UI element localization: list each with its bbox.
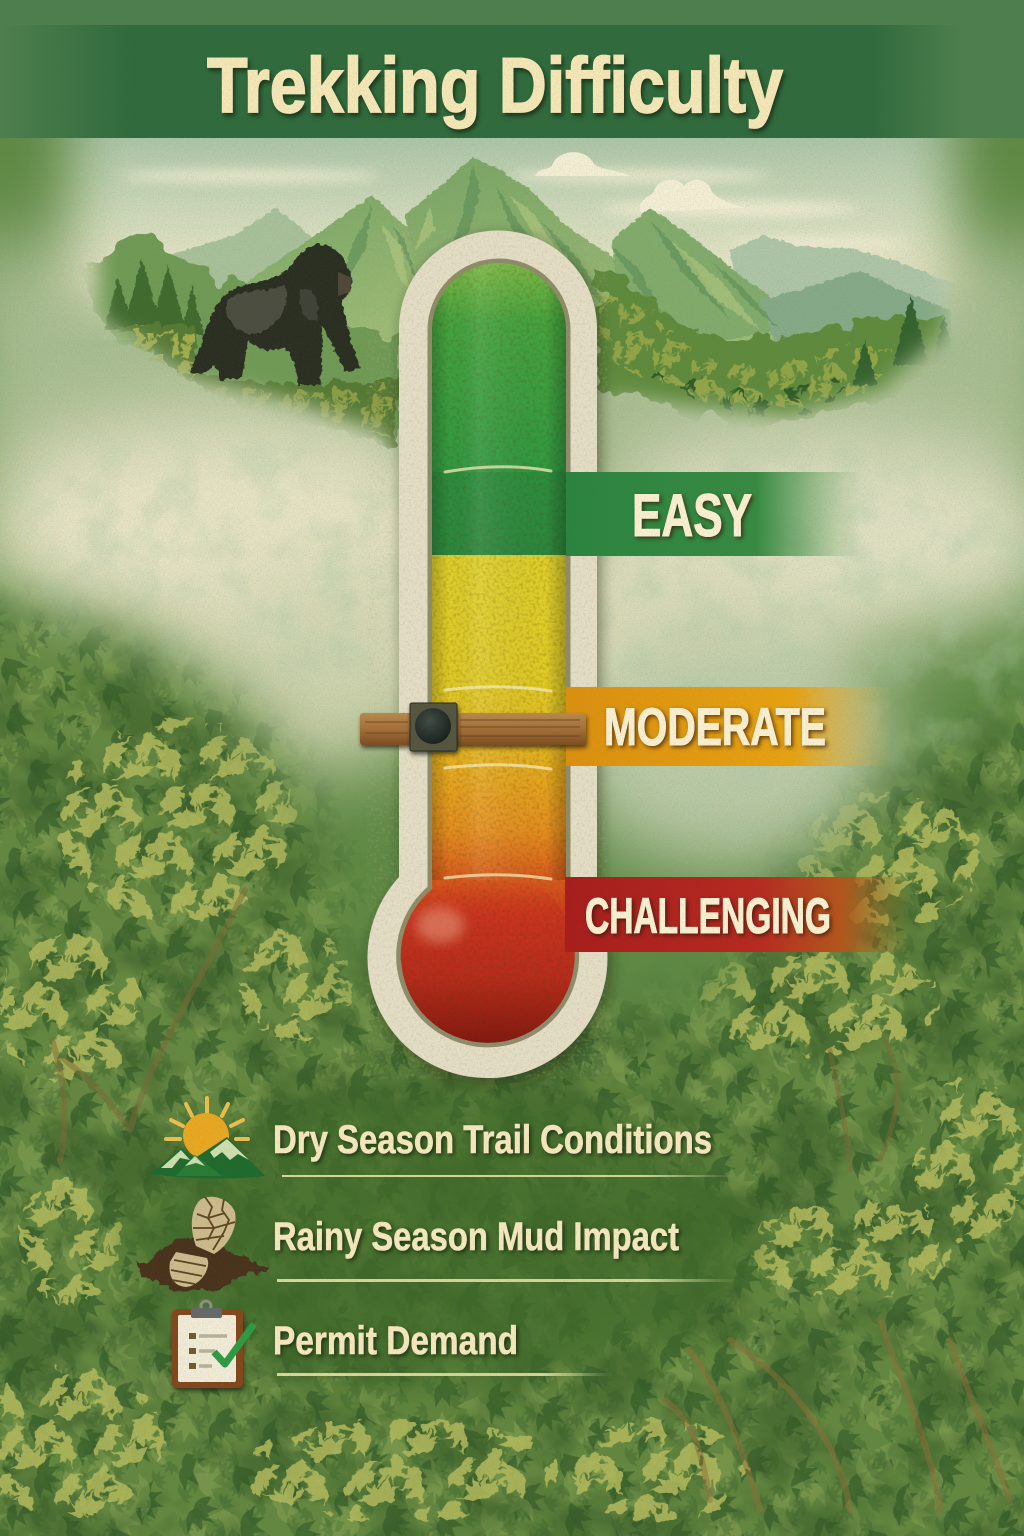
tree branches: [52, 890, 1010, 1510]
tree line right: [597, 275, 956, 430]
thermometer: [367, 231, 607, 1078]
icon: boot print in mud: [135, 1197, 268, 1289]
mountain ridges: [340, 165, 780, 330]
band: challenging: CHALLENGING: [585, 888, 831, 944]
dark panel behind factor list: [130, 1095, 750, 1385]
sky: [0, 130, 1024, 340]
clouds: [120, 170, 910, 249]
label: Rainy Season Mud Impact: [273, 1215, 679, 1259]
band: moderate: [566, 687, 892, 766]
tree line left: [85, 232, 400, 448]
band: easy: [566, 472, 860, 556]
mountains: [170, 157, 960, 360]
cloud puffs: [535, 152, 745, 212]
slider: knob: [415, 708, 451, 744]
foliage: layered leaves: [0, 580, 1024, 1536]
tube highlights: [445, 467, 551, 879]
tube fill: [395, 260, 580, 1060]
title banner: [0, 0, 1024, 138]
factor row: rainy season: [135, 1197, 738, 1289]
casing stone texture: [367, 231, 607, 1078]
slider: metal clamp: [410, 703, 457, 751]
slider: wooden marker: [360, 703, 586, 751]
thermometer casing: [367, 231, 607, 1078]
landscape: mountains and tree lines: [85, 157, 960, 448]
band: challenging: [565, 877, 911, 952]
icon: clipboard with check: [172, 1301, 254, 1388]
icon: gorilla: [190, 244, 360, 385]
title: Trekking Difficulty: [207, 41, 783, 129]
factor row: permit demand: [172, 1301, 612, 1388]
label: Dry Season Trail Conditions: [273, 1118, 712, 1162]
band: easy: EASY: [632, 482, 752, 549]
conifers right: [853, 296, 956, 385]
factor row: dry season: [150, 1098, 735, 1179]
label: Permit Demand: [273, 1319, 518, 1363]
band: moderate: MODERATE: [604, 698, 826, 757]
icon: sun and mountains: [150, 1098, 265, 1179]
mountain light facets: [382, 195, 760, 330]
casing inner rim: [401, 263, 575, 1043]
background: forest and mist wash: [0, 196, 1024, 877]
mist mottling: [38, 444, 1024, 786]
conifers left: [104, 258, 204, 335]
